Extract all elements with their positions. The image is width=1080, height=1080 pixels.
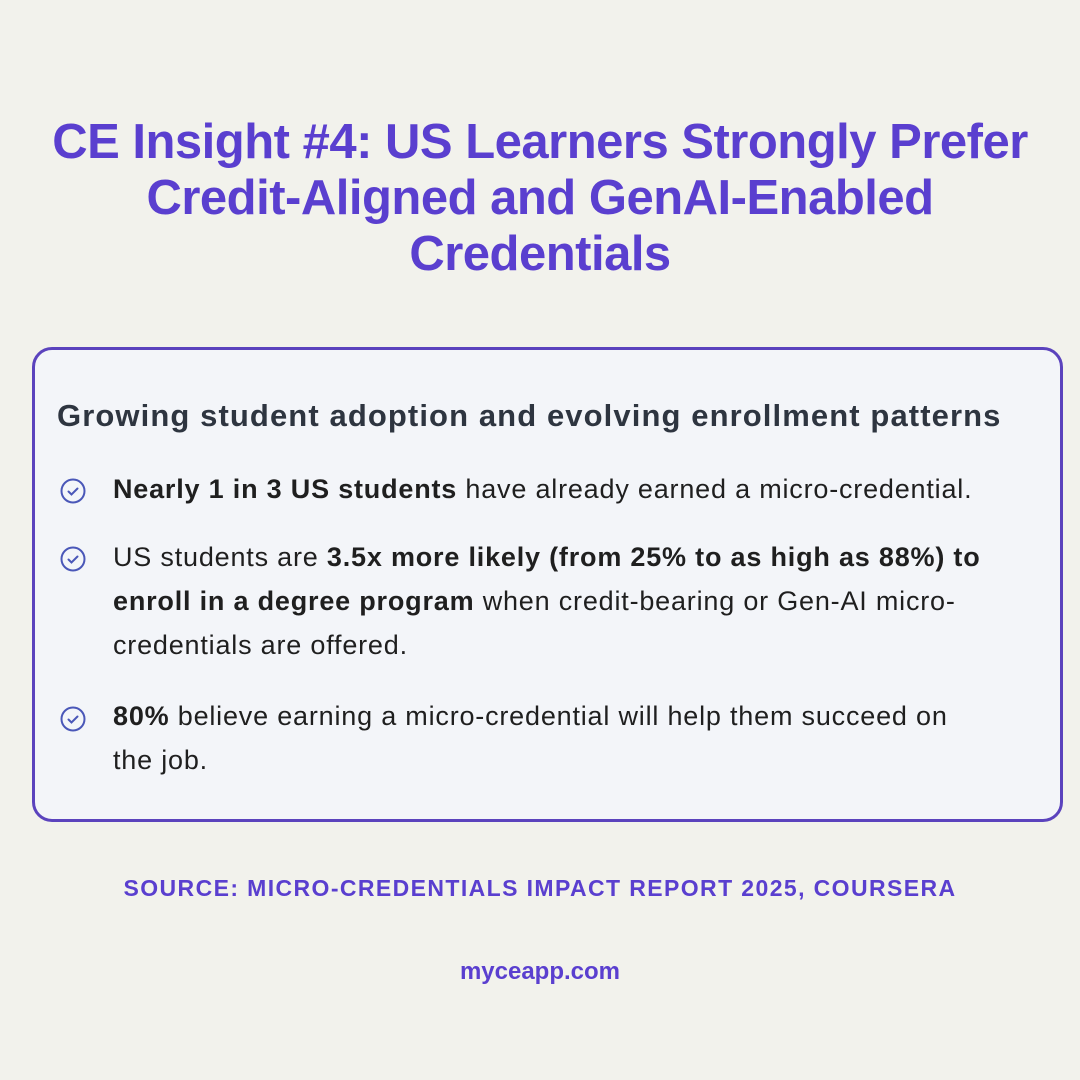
bullet 2: enroll in a degree program when credit-bearing or Gen-AI micro- bbox=[113, 586, 956, 616]
bullet 2: credentials are offered. bbox=[113, 630, 408, 660]
bullet 2 bbox=[113, 542, 981, 660]
icon: check 1 bbox=[60, 478, 86, 504]
bullet 2: US students are 3.5x more likely (from 25% to as high as 88%) to bbox=[113, 542, 981, 572]
bullet 3: 80% believe earning a micro-credential will help them succeed on bbox=[113, 701, 948, 731]
bullet 3: the job. bbox=[113, 745, 208, 775]
title: CE Insight #4: US Learners Strongly Prefer bbox=[52, 115, 1028, 169]
bullet 3 bbox=[113, 701, 948, 775]
title bbox=[52, 115, 1028, 281]
panel: student adoption bbox=[32, 347, 1063, 822]
icon: check 2 bbox=[60, 546, 86, 572]
title: Credit-Aligned and GenAI-Enabled bbox=[146, 171, 934, 225]
source: SOURCE: MICRO-CREDENTIALS IMPACT REPORT 2025, COURSERA bbox=[124, 875, 956, 901]
title: Credentials bbox=[409, 227, 671, 281]
bullet 1: Nearly 1 in 3 US students have already earned a micro-credential. bbox=[113, 474, 972, 504]
panel heading: Growing student adoption and evolving enrollment patterns bbox=[57, 398, 1002, 433]
website url: myceapp.com bbox=[460, 958, 620, 985]
icon: check 3 bbox=[60, 706, 86, 732]
